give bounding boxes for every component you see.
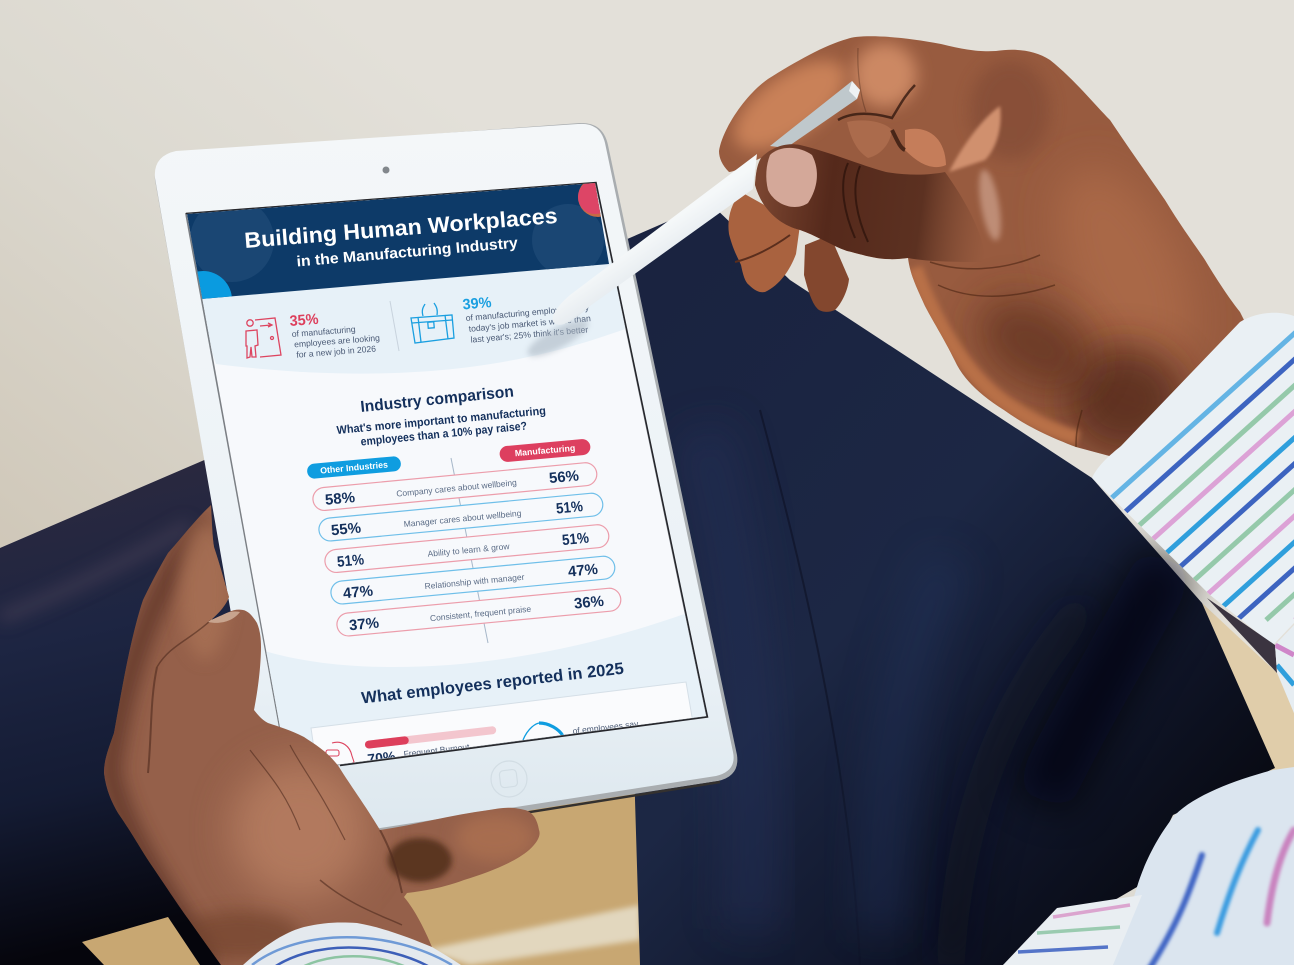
right shirt cuff: [976, 300, 1294, 720]
legend: Other Industries: Other Industries: [320, 459, 388, 476]
floor: [70, 790, 650, 965]
row: ability to learn and grow: 51%: [561, 530, 590, 549]
palm highlight: [230, 760, 370, 900]
palm creases: [930, 255, 1082, 447]
middle fingers: [847, 106, 1001, 172]
left hand: [95, 495, 555, 965]
35% value: 35%: [289, 311, 319, 330]
row: ability to learn and grow: Ability to learn & grow: [427, 541, 511, 559]
row: ability to learn and grow: [324, 524, 610, 573]
hand top lit: [180, 520, 230, 660]
legend: Manufacturing: Manufacturing: [514, 443, 576, 458]
right thumb: [755, 144, 1005, 262]
palm dark creases area: [961, 279, 1109, 411]
row: consistent, frequent praise: [336, 587, 622, 637]
stat: 35%: [246, 311, 381, 360]
row: manager cares about wellbeing: Manager cares about wellbeing: [403, 508, 522, 529]
gauge arc: [523, 723, 563, 740]
section heading: Industry comparison: Industry comparison: [360, 384, 515, 416]
beige wedge at right: [1202, 603, 1294, 775]
icon: person at door: [246, 318, 281, 358]
shadow along left edge: [110, 520, 210, 965]
39% description: today's job market is worse than: [468, 313, 591, 334]
section heading: What employees reported in 2025: What employees reported in 2025: [360, 660, 625, 707]
right hand back: [710, 30, 1260, 470]
lower orange palm edge: [915, 268, 1078, 438]
fist shadow: [970, 60, 1050, 160]
lower right sleeve: [1100, 760, 1294, 965]
row: manager cares about wellbeing: [318, 492, 604, 542]
row: manager cares about wellbeing: 51%: [555, 498, 584, 518]
gauge label: of employees say: [572, 718, 640, 736]
thumb gloss: [975, 168, 1005, 242]
finger gaps: [838, 48, 915, 150]
cuff fold shadow: [1207, 598, 1277, 673]
row: company cares about wellbeing: [312, 462, 598, 511]
row: ability to learn and grow: 51%: [336, 551, 365, 571]
pen: [553, 81, 860, 325]
white results card: [311, 682, 696, 790]
middle sleeve strip: [1000, 890, 1150, 965]
knuckle light: [853, 43, 917, 107]
subtitle: in the Manufacturing Industry: [296, 235, 519, 270]
axis line: [451, 458, 488, 643]
70% value: 70%: [367, 748, 397, 767]
fingertip: [455, 814, 535, 862]
row: company cares about wellbeing: 58%: [324, 489, 356, 509]
row: consistent, frequent praise: Consistent, frequent praise: [429, 604, 532, 623]
icon: briefcase: [411, 303, 454, 343]
legend: Manufacturing: [499, 438, 591, 463]
screen content: [187, 183, 706, 764]
section question: employees than a 10% pay raise?: [360, 421, 528, 448]
lower palm shadow: [180, 911, 300, 959]
left shirt cuff: [240, 915, 465, 965]
39% value: 39%: [462, 294, 492, 313]
row: relationship with manager: 47%: [567, 561, 599, 581]
row: company cares about wellbeing: Company cares about wellbeing: [396, 477, 517, 499]
icon: burnout head: [326, 742, 354, 765]
finger base shadow: [388, 838, 452, 882]
creases: [148, 620, 402, 925]
camera: [382, 166, 390, 174]
dark underside: [385, 782, 720, 835]
title: Building Human Workplaces: [243, 203, 558, 253]
thumbnail: [208, 611, 240, 623]
wrist shadow: [1065, 345, 1185, 455]
right hand lower fingers: [728, 192, 849, 312]
row: relationship with manager: Relationship with manager: [424, 572, 525, 591]
lower light blue band: [262, 612, 730, 790]
section question: [336, 405, 546, 448]
39% description: of manufacturing employees say: [465, 302, 590, 323]
home button: [491, 761, 527, 797]
lower cuff fold: [1270, 620, 1294, 720]
row: relationship with manager: 47%: [342, 583, 374, 602]
39% description: last year's; 25% think it's better: [470, 324, 589, 345]
burnout label: Frequent Burnout: [403, 741, 471, 759]
row: consistent, frequent praise: 37%: [348, 615, 380, 634]
35% description: of manufacturing: [291, 324, 356, 339]
header banner: [187, 183, 609, 299]
35% description: for a new job in 2026: [296, 343, 377, 360]
stat divider: [390, 301, 399, 351]
section question: What's more important to manufacturing: [336, 405, 546, 437]
screen frame: [185, 182, 708, 772]
row: company cares about wellbeing: 56%: [548, 467, 580, 487]
row: manager cares about wellbeing: 55%: [330, 520, 362, 539]
light blue band under header: [190, 245, 628, 374]
tablet edge: [155, 123, 737, 846]
upper back right: [1029, 147, 1221, 393]
tablet: [155, 123, 737, 846]
row: relationship with manager: [330, 555, 616, 605]
tablet body: [155, 124, 734, 842]
knuckle wrinkles: [843, 163, 868, 242]
stat: 39%: [411, 294, 592, 345]
trouser: right leg: [625, 203, 1275, 965]
burnout bar: [365, 726, 497, 749]
trouser: left leg: [0, 458, 260, 965]
row: consistent, frequent praise: 36%: [573, 593, 605, 613]
index finger light: [720, 43, 860, 167]
35% description: employees are looking: [294, 333, 380, 349]
pen shadow on screen: [523, 313, 593, 363]
legend: Other Industries: [307, 456, 401, 479]
thumbnail: [766, 148, 817, 207]
